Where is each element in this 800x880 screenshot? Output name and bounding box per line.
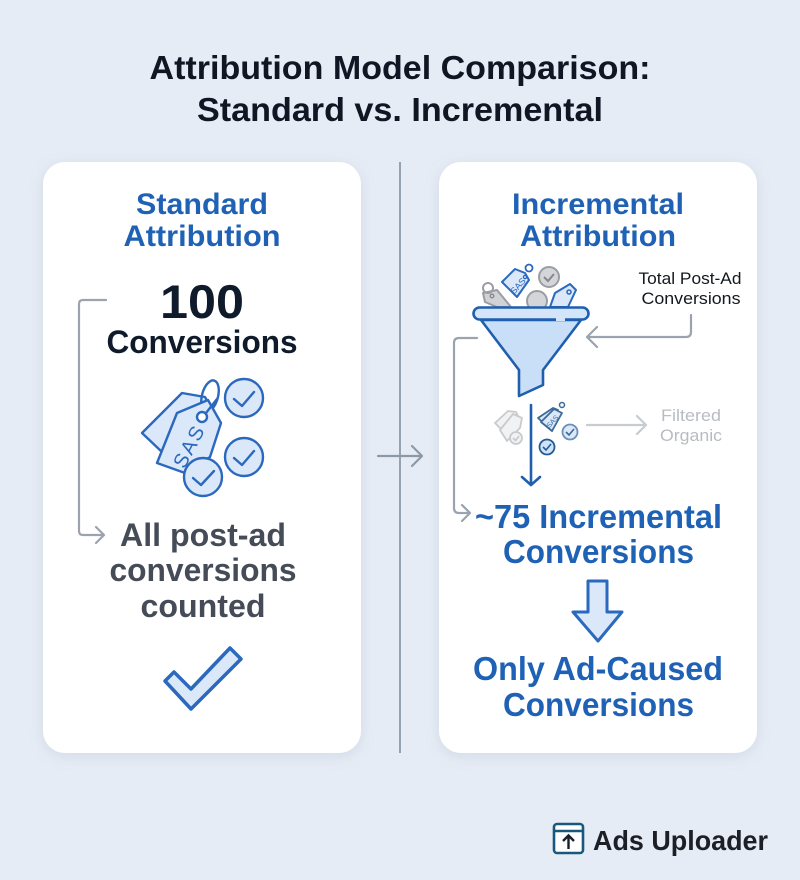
- icon: large check mark: [165, 648, 241, 709]
- icon: items entering funnel: [483, 264, 576, 311]
- icon: filtered grey tags: [495, 411, 522, 444]
- incremental heading: [512, 188, 684, 253]
- label: filtered organic: Organic: [660, 427, 722, 445]
- icon: funnel: [474, 308, 588, 396]
- icon: kept tags and checks: [538, 402, 578, 454]
- bracket arrow: conversions to counted: [79, 300, 106, 543]
- icon: block down arrow: [573, 581, 622, 641]
- title: [150, 49, 650, 128]
- label: total post-ad conversions: [638, 270, 742, 308]
- text: only ad-caused conversions: Only Ad-Caused: [473, 650, 723, 687]
- label: filtered organic: Filtered: [661, 407, 721, 425]
- icon: sale tags with check marks: [142, 378, 263, 496]
- stat: 100 conversions: Conversions: [106, 324, 298, 360]
- text: all post-ad conversions counted: [110, 517, 296, 624]
- incremental card background: [439, 162, 757, 753]
- center divider: [399, 162, 401, 753]
- stat: 100 conversions: 100: [160, 275, 244, 328]
- text: 75 incremental conversions: [475, 498, 722, 570]
- logo: ads uploader: [554, 824, 768, 856]
- arrow: to filtered organic: [587, 416, 646, 434]
- standard heading: [124, 188, 280, 253]
- label: filtered organic: [660, 407, 722, 445]
- incremental heading: Incremental: [512, 188, 684, 221]
- icon: kept tags and checks: SAS: [546, 414, 561, 430]
- panel: incremental attribution: [439, 162, 757, 753]
- text: all post-ad conversions counted: counted: [140, 588, 266, 624]
- logo wordmark: Ads Uploader: [593, 825, 768, 856]
- standard heading: Attribution: [124, 220, 280, 253]
- panel: standard attribution: [43, 162, 361, 753]
- label: total post-ad conversions: Conversions: [642, 290, 740, 308]
- icon: items entering funnel: SAS: [508, 276, 528, 296]
- text: only ad-caused conversions: [473, 650, 723, 723]
- arrow: total conversions into funnel: [587, 315, 691, 347]
- title: Standard vs. Incremental: [197, 91, 603, 128]
- incremental heading: Attribution: [520, 220, 676, 253]
- label: total post-ad conversions: Total Post-Ad: [638, 270, 742, 288]
- text: 75 incremental conversions: ~75 Incremental: [475, 498, 722, 535]
- text: only ad-caused conversions: Conversions: [503, 686, 694, 723]
- text: all post-ad conversions counted: All post-ad: [120, 517, 286, 553]
- stat: 100 conversions: [106, 275, 298, 360]
- arrow: between panels: [378, 446, 422, 466]
- icon: upload box: [554, 824, 583, 853]
- bracket arrow: funnel to incremental: [454, 338, 477, 521]
- text: 75 incremental conversions: Conversions: [503, 533, 694, 570]
- icon: sale tags with check marks: SAS: [169, 421, 210, 472]
- title: Attribution Model Comparison:: [150, 49, 650, 86]
- standard heading: Standard: [136, 188, 268, 221]
- arrow: funnel output: [522, 405, 540, 485]
- standard card background: [43, 162, 361, 753]
- text: all post-ad conversions counted: conversions: [110, 552, 296, 588]
